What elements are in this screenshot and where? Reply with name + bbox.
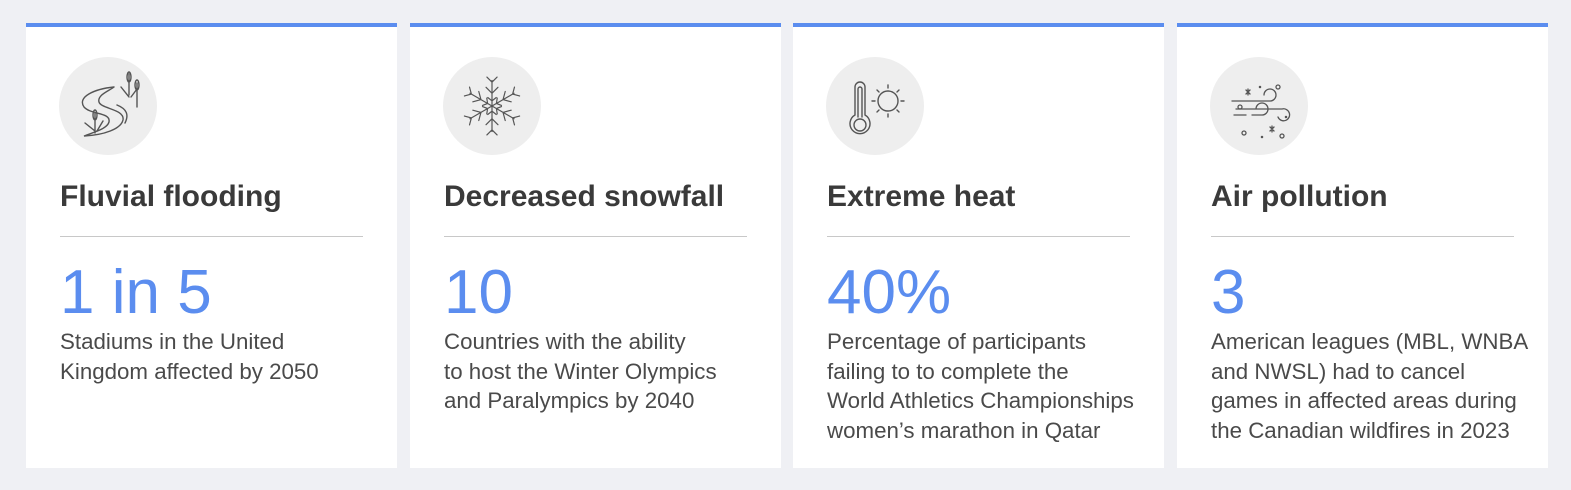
description: games in affected areas during	[1211, 388, 1517, 413]
panel: decreased snowfall	[410, 23, 781, 468]
description	[444, 329, 717, 413]
description: the Canadian wildfires in 2023	[1211, 418, 1510, 442]
description: Countries with the ability	[444, 329, 686, 354]
icon: wind and particles	[1210, 57, 1308, 155]
description: women’s marathon in Qatar	[827, 418, 1100, 442]
description: failing to to complete the	[827, 358, 1069, 384]
description: Percentage of participants	[827, 329, 1086, 354]
description	[1211, 329, 1528, 442]
description	[827, 329, 1134, 442]
panel: fluvial flooding	[26, 23, 397, 468]
panel: extreme heat	[793, 23, 1164, 468]
heading: Decreased snowfall	[444, 180, 724, 213]
description: Kingdom affected by 2050	[60, 358, 319, 384]
stat number: 1 in 5	[60, 258, 212, 327]
stat number: 3	[1211, 258, 1245, 327]
panel: air pollution	[1177, 23, 1548, 468]
icon: snowflake	[443, 57, 541, 155]
description: Stadiums in the United	[60, 329, 284, 354]
description	[60, 329, 319, 384]
heading: Extreme heat	[827, 180, 1015, 213]
heading: Fluvial flooding	[60, 180, 282, 213]
icon: river with reeds	[59, 57, 157, 155]
description: and NWSL) had to cancel	[1211, 358, 1465, 384]
icon: thermometer and sun	[826, 57, 924, 155]
description: and Paralympics by 2040	[444, 388, 694, 413]
description: to host the Winter Olympics	[444, 358, 717, 384]
stat number: 10	[444, 258, 513, 327]
description: American leagues (MBL, WNBA	[1211, 329, 1528, 354]
description: World Athletics Championships	[827, 388, 1134, 413]
heading: Air pollution	[1211, 180, 1388, 213]
stat number: 40%	[827, 258, 951, 327]
